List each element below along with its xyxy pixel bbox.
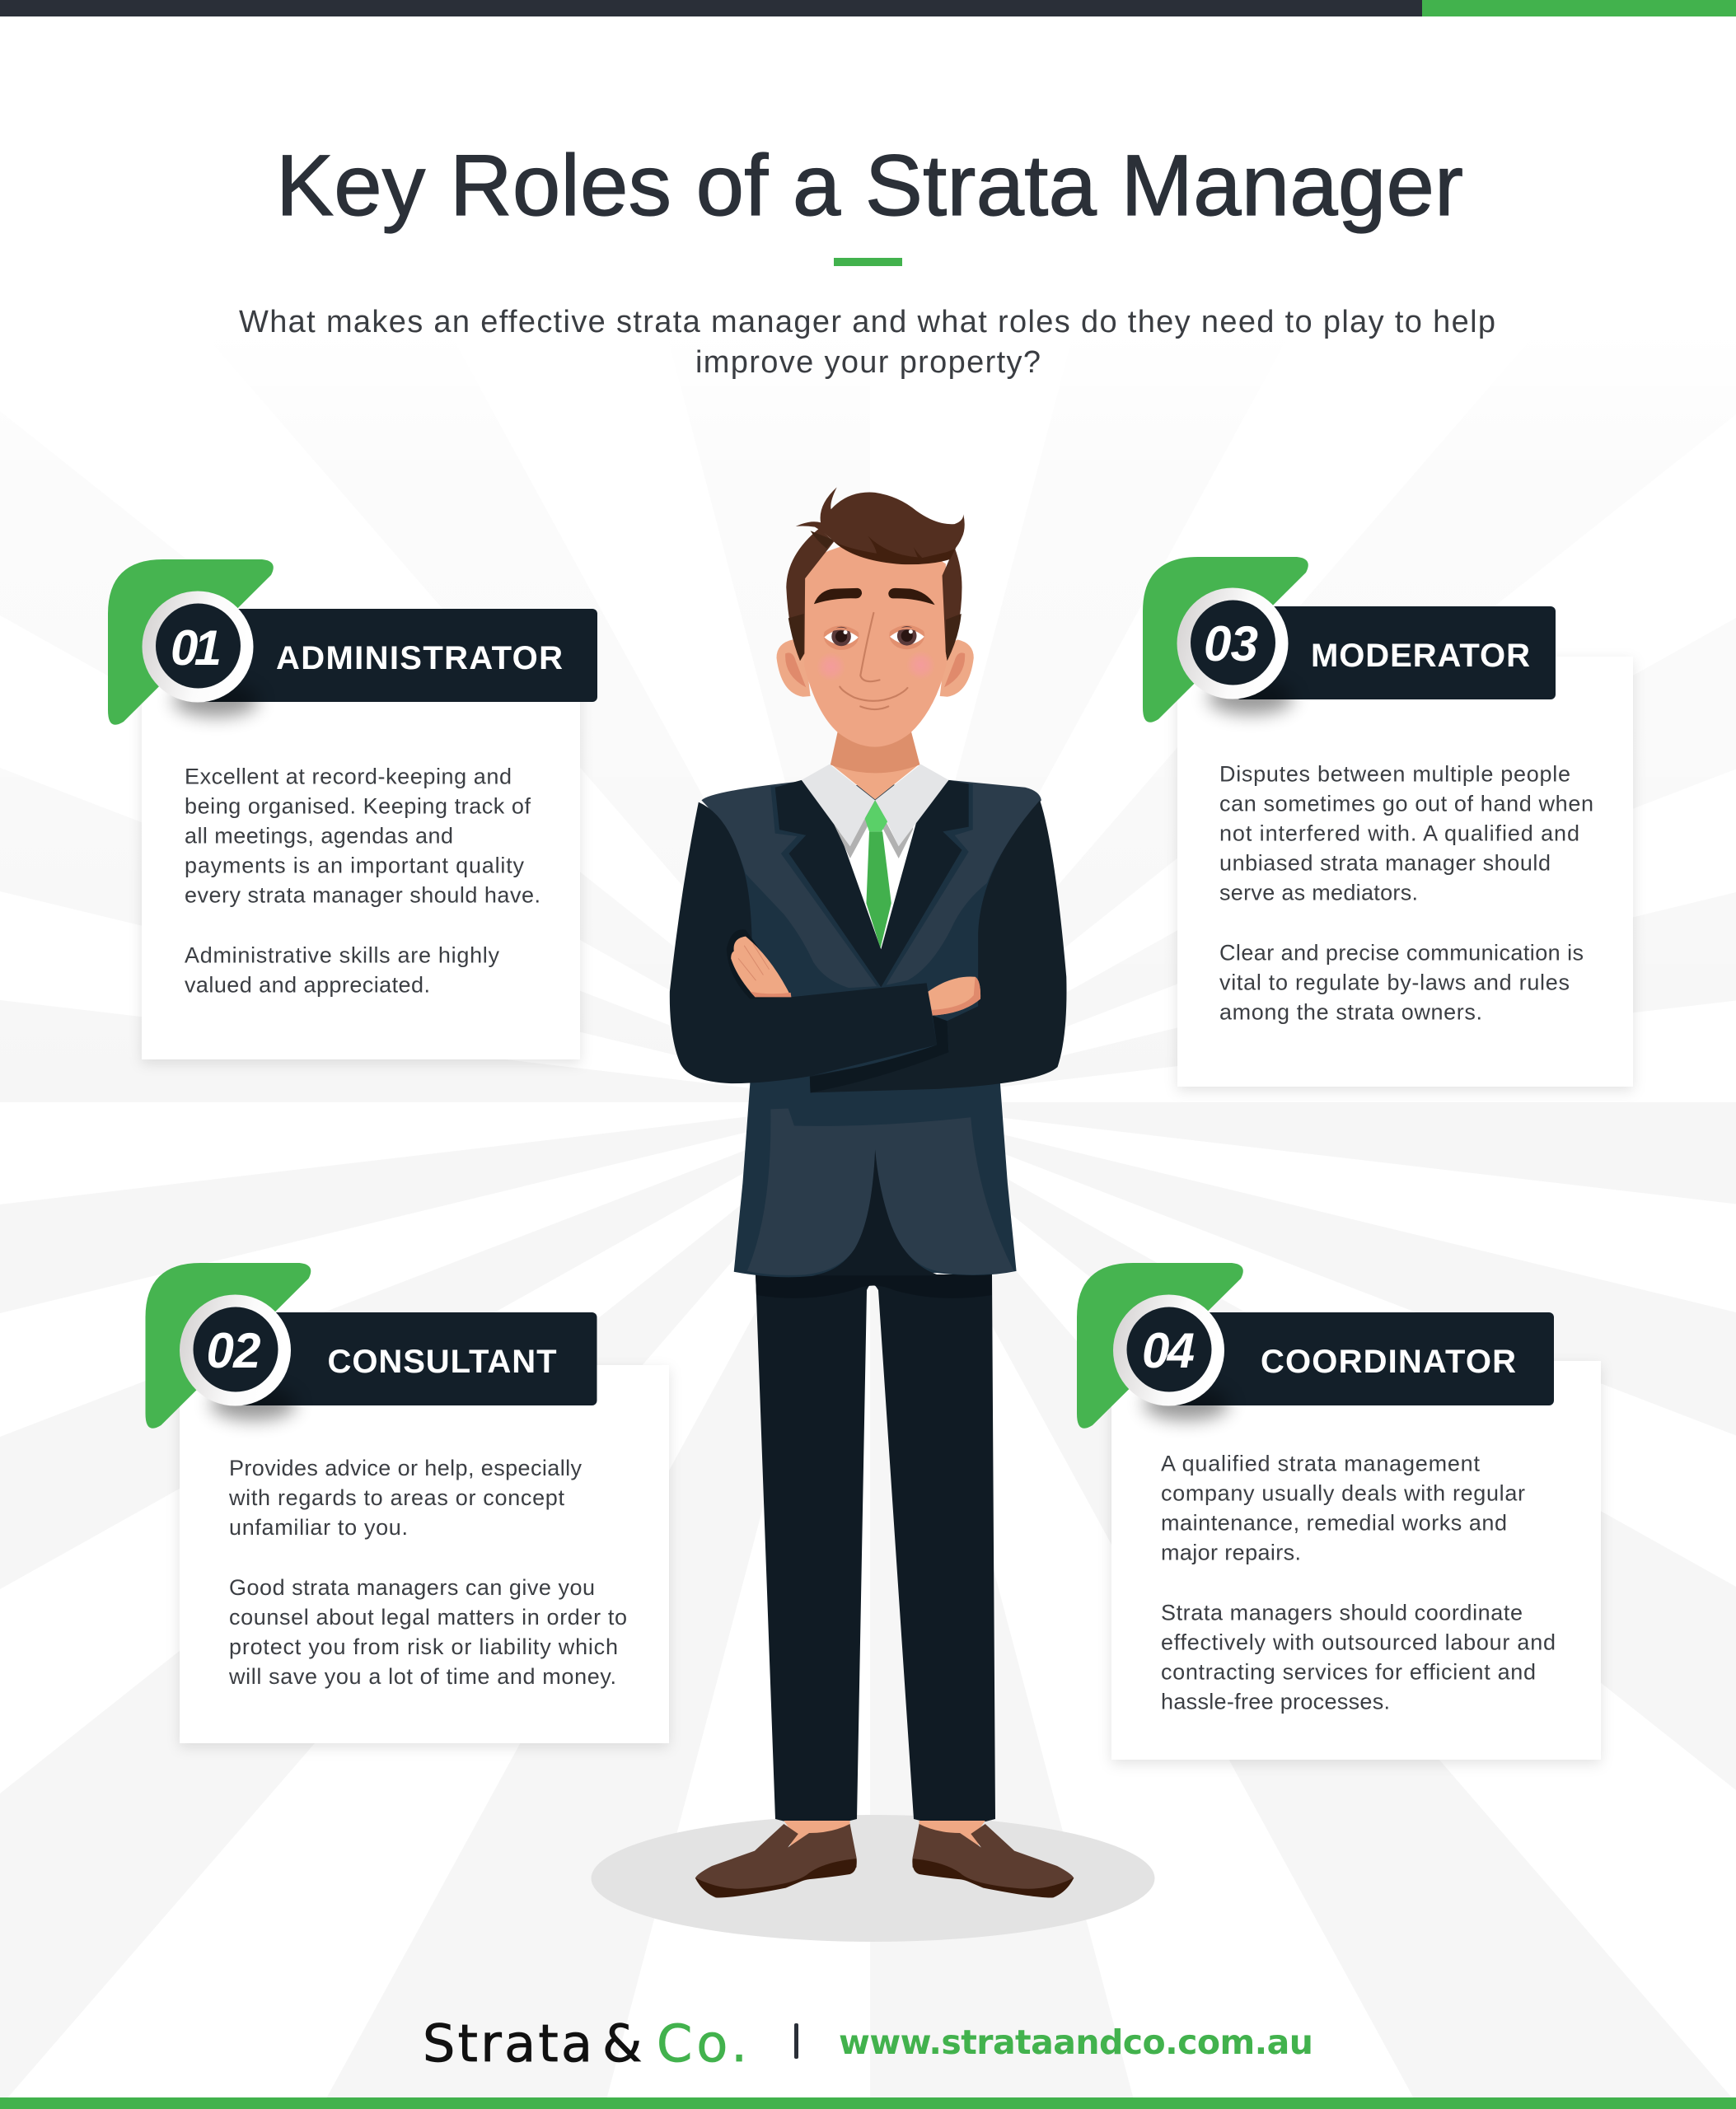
card text: hassle-free processes. (1161, 1689, 1390, 1714)
card text: protect you from risk or liability which (229, 1634, 618, 1659)
card text: Disputes between multiple people (1219, 761, 1570, 786)
head (776, 487, 974, 773)
footer logo: Strata (423, 2013, 592, 2074)
card text: not interfered with. A qualified and (1219, 821, 1579, 845)
title: Key Roles of a Strata Manager (276, 138, 1463, 234)
card text: all meetings, agendas and (185, 824, 453, 849)
footer logo: & (602, 2013, 642, 2074)
footer logo: Co. (657, 2013, 747, 2074)
card text: unfamiliar to you. (229, 1515, 408, 1540)
footer logo (423, 2013, 747, 2074)
header badge 02: 02 (206, 1323, 260, 1378)
card text: can sometimes go out of hand when (1219, 791, 1593, 816)
subtitle (239, 305, 1495, 380)
header badge 02: CONSULTANT (328, 1344, 557, 1380)
card text: Excellent at record-keeping and (185, 765, 512, 789)
header badge 03: 03 (1204, 616, 1258, 671)
card text: Clear and precise communication is (1219, 941, 1584, 966)
card text (1219, 761, 1593, 1025)
bottom bar (0, 2097, 1736, 2109)
subtitle: improve your property? (695, 345, 1041, 380)
blush (817, 652, 845, 681)
card text: with regards to areas or concept (228, 1485, 564, 1510)
footer url: www.strataandco.com.au (839, 2022, 1313, 2062)
header badge 01 (108, 559, 597, 725)
card text: A qualified strata management (1161, 1452, 1480, 1476)
subtitle: What makes an effective strata manager and what roles do they need to play to help (239, 305, 1495, 339)
card body (1177, 657, 1633, 1087)
card body (1111, 1361, 1601, 1760)
eyes (823, 620, 926, 650)
card text: maintenance, remedial works and (1161, 1511, 1507, 1536)
card text (1161, 1452, 1556, 1714)
trousers (756, 1274, 995, 1825)
top bar (0, 0, 1736, 16)
right hand (928, 976, 980, 1016)
header badge 04 (1077, 1263, 1554, 1429)
card text: being organised. Keeping track of (185, 794, 531, 819)
face (803, 541, 948, 747)
eyebrows (814, 588, 935, 605)
title underline (834, 258, 902, 266)
card text: every strata manager should have. (185, 883, 540, 908)
card text: Provides advice or help, especially (229, 1456, 582, 1480)
card text: serve as mediators. (1219, 880, 1418, 905)
floor shadow (592, 1815, 1155, 1942)
header badge 01: 01 (171, 620, 222, 676)
card text (228, 1456, 627, 1689)
card text: Strata managers should coordinate (1161, 1600, 1523, 1625)
header badge 04: COORDINATOR (1261, 1344, 1516, 1380)
card text: will save you a lot of time and money. (228, 1664, 616, 1689)
header badge 03: MODERATOR (1311, 638, 1530, 674)
card text: among the strata owners. (1219, 1000, 1482, 1025)
card text: vital to regulate by-laws and rules (1219, 970, 1570, 995)
card text: effectively with outsourced labour and (1161, 1630, 1556, 1654)
left hand (727, 929, 791, 999)
card text: unbiased strata manager should (1219, 850, 1551, 875)
figure: strata manager (592, 487, 1155, 1942)
ears (776, 639, 974, 697)
shoes (695, 1821, 1074, 1897)
panel: coordinator (1077, 1263, 1601, 1760)
card text: Administrative skills are highly (185, 942, 499, 967)
nose and mouth (840, 613, 907, 709)
header badge 02 (145, 1263, 597, 1429)
jacket and arms (670, 764, 1067, 1277)
card text: valued and appreciated. (185, 972, 430, 997)
header badge 01: ADMINISTRATOR (276, 640, 563, 676)
card body (180, 1365, 669, 1743)
panel: moderator (1143, 557, 1633, 1087)
card text: payments is an important quality (185, 853, 524, 878)
header badge 04: 04 (1142, 1323, 1195, 1378)
card text: company usually deals with regular (1161, 1481, 1525, 1506)
card text: counsel about legal matters in order to (229, 1605, 627, 1630)
card text: Good strata managers can give you (229, 1575, 595, 1600)
card text (185, 765, 540, 997)
card body (142, 659, 580, 1059)
hair (786, 528, 962, 661)
footer divider (794, 2023, 798, 2059)
panel: administrator (108, 559, 597, 1059)
header badge 03 (1143, 557, 1556, 722)
card text: contracting services for efficient and (1161, 1659, 1536, 1684)
panel: consultant (145, 1263, 669, 1743)
card text: major repairs. (1161, 1541, 1301, 1565)
neck (831, 728, 919, 773)
